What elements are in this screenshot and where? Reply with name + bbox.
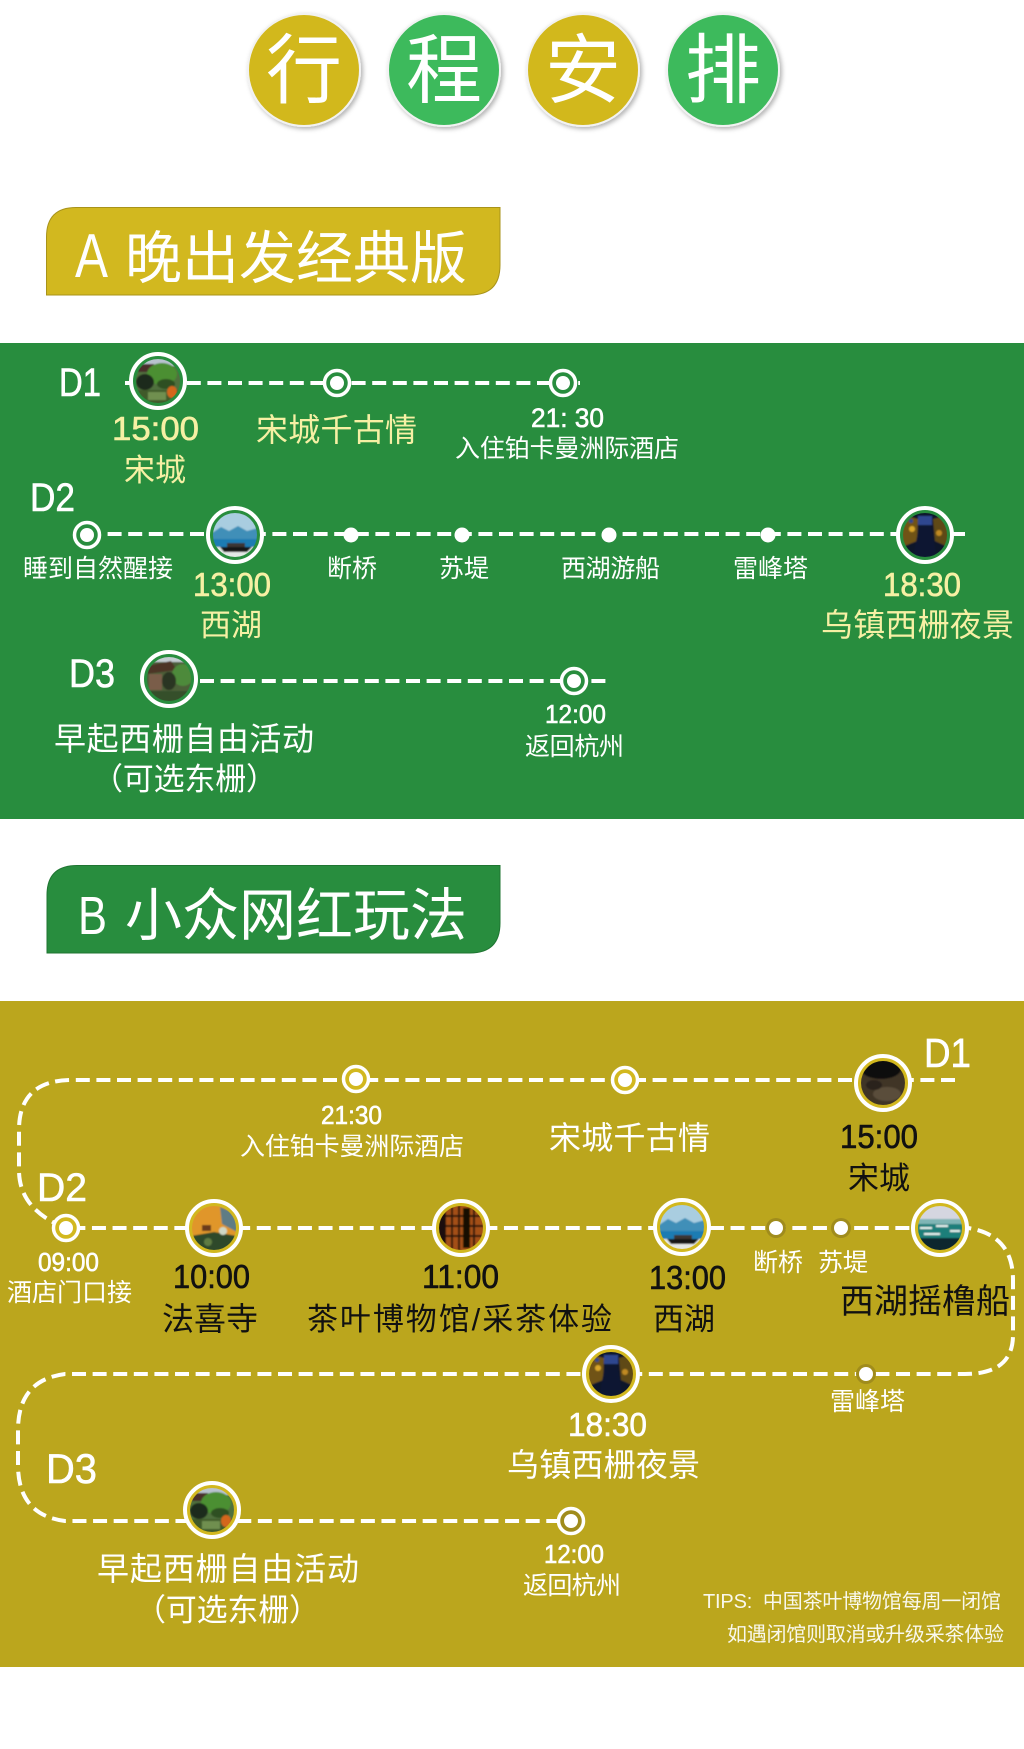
label return: 返回杭州: [525, 733, 624, 761]
icon: West Lake photo: [208, 508, 262, 562]
label pick-up: 酒店门口接: [7, 1279, 132, 1307]
icon: Songcheng photo: [856, 1056, 910, 1110]
title badge: 排: [667, 14, 779, 126]
label 西湖游船: 西湖游船: [561, 555, 660, 583]
D3 label: D3: [46, 1445, 97, 1492]
label 苏堤: 苏堤: [818, 1249, 868, 1277]
D2 label: D2: [30, 476, 75, 520]
heading banner: B 小众网红玩法: 小众网红玩法: [125, 884, 467, 948]
label 宋城千古情: 宋城千古情: [256, 412, 417, 448]
icon: Faxi temple photo: [187, 1201, 241, 1255]
title badge: 安: [527, 14, 639, 126]
time 10:00: 10:00: [173, 1258, 250, 1295]
icon: Wuzhen night photo: [898, 508, 952, 562]
stop marker: hotel: [344, 1066, 368, 1092]
winding dashed route line: [18, 1080, 1013, 1521]
heading banner: A 晚出发经典版: 晚出发经典版: [125, 227, 467, 291]
stop marker: return: [562, 668, 586, 694]
label 雷峰塔: 雷峰塔: [733, 555, 808, 583]
icon: West Lake photo: [655, 1200, 709, 1254]
stop marker: hotel: [550, 370, 576, 396]
title badge: 程: [388, 14, 500, 126]
label optional: （可选东栅）: [92, 762, 277, 797]
time 09:00: 09:00: [38, 1247, 99, 1277]
route A day 3: [54, 652, 624, 797]
heading banner: B 小众网红玩法: B: [78, 886, 107, 946]
label 宋城: 宋城: [848, 1161, 910, 1196]
icon: Wuzhen night photo: [584, 1347, 638, 1401]
label 宋城: 宋城: [124, 453, 186, 488]
label tea museum: 茶叶博物馆/采茶体验: [307, 1302, 612, 1337]
icon: Songcheng photo: [131, 354, 185, 408]
label 西湖: 西湖: [653, 1302, 715, 1337]
title: 行程安排: [248, 14, 779, 126]
panel: route A: [0, 343, 1024, 819]
dots: 断桥 and 苏堤: [766, 1218, 851, 1238]
D2 label: D2: [37, 1166, 87, 1210]
time 18:30: 18:30: [883, 566, 961, 603]
stop marker: show: [324, 370, 350, 396]
label 西湖: 西湖: [200, 608, 262, 643]
tips note: [703, 1590, 1004, 1646]
tips note: TIPS: 中国茶叶博物馆每周一闭馆: [703, 1590, 1001, 1613]
label 断桥: 断桥: [327, 555, 377, 583]
route A day 2: [23, 476, 1014, 643]
dots: scenic stops: [344, 528, 776, 542]
time 13:00: 13:00: [193, 566, 271, 603]
D3 label: D3: [69, 652, 115, 696]
dashed line day 1: [125, 381, 580, 385]
dashed line day 3: [200, 679, 610, 683]
label hotel: 入住铂卡曼洲际酒店: [240, 1133, 464, 1161]
label optional: （可选东栅）: [135, 1593, 320, 1628]
title badge: 程: 程: [406, 29, 482, 114]
title badge: 排: 排: [685, 29, 761, 114]
label 宋城千古情: 宋城千古情: [549, 1120, 710, 1156]
route A day 1: [59, 354, 679, 488]
time 11:00: 11:00: [422, 1258, 499, 1295]
label 断桥: 断桥: [753, 1249, 803, 1277]
stop marker: pick-up: [54, 1216, 78, 1240]
time 12:00: 12:00: [544, 1539, 604, 1569]
route B evening and day 3 stops: [97, 1347, 905, 1628]
icon: Xizha garden photo: [142, 652, 196, 706]
label pick-up: 睡到自然醒接: [23, 555, 173, 583]
label hotel: 入住铂卡曼洲际酒店: [455, 435, 679, 463]
label free activity: 早起西栅自由活动: [97, 1551, 359, 1587]
stop marker: return: [558, 1508, 584, 1534]
D1 label: D1: [924, 1030, 971, 1076]
time 15:00: 15:00: [840, 1118, 918, 1155]
day labels: [37, 1030, 971, 1492]
icon: tea museum photo: [434, 1201, 488, 1255]
label 雷峰塔: 雷峰塔: [830, 1388, 905, 1416]
icon: Xizha garden photo: [185, 1483, 239, 1537]
time 21:30: 21: 30: [531, 403, 604, 433]
route B day 1 stops: [240, 1056, 918, 1196]
label free activity: 早起西栅自由活动: [54, 721, 314, 757]
label 法喜寺: 法喜寺: [162, 1301, 258, 1337]
time 21:30: 21:30: [321, 1100, 382, 1130]
label 西湖摇橹船: 西湖摇橹船: [840, 1283, 1010, 1321]
title badge: 行: [248, 14, 360, 126]
label 乌镇西栅夜景: 乌镇西栅夜景: [507, 1447, 700, 1483]
time 13:00: 13:00: [649, 1259, 726, 1296]
label 苏堤: 苏堤: [439, 555, 489, 583]
icon: rowing boat photo: [913, 1201, 967, 1255]
time 18:30: 18:30: [568, 1406, 647, 1443]
title badge: 行: 行: [266, 29, 342, 114]
label 乌镇西栅夜景: 乌镇西栅夜景: [821, 607, 1014, 643]
stop marker: show: [612, 1068, 638, 1092]
tips note: 如遇闭馆则取消或升级采茶体验: [727, 1623, 1004, 1646]
stop marker: pick-up: [74, 522, 100, 548]
time 15:00: 15:00: [112, 410, 199, 447]
heading banner: A 晚出发经典版: [46, 208, 500, 295]
heading banner: B 小众网红玩法: [47, 866, 500, 953]
label return: 返回杭州: [523, 1572, 621, 1600]
route B day 2 stops: [7, 1200, 1010, 1337]
time 12:00: 12:00: [545, 699, 606, 729]
dashed line day 2: [87, 532, 965, 536]
dot: 雷峰塔: [856, 1364, 876, 1384]
D1 label: D1: [59, 361, 101, 405]
title badge: 安: 安: [545, 29, 621, 114]
heading banner: A 晚出发经典版: A: [75, 222, 109, 291]
panel: route B: [0, 1001, 1024, 1667]
